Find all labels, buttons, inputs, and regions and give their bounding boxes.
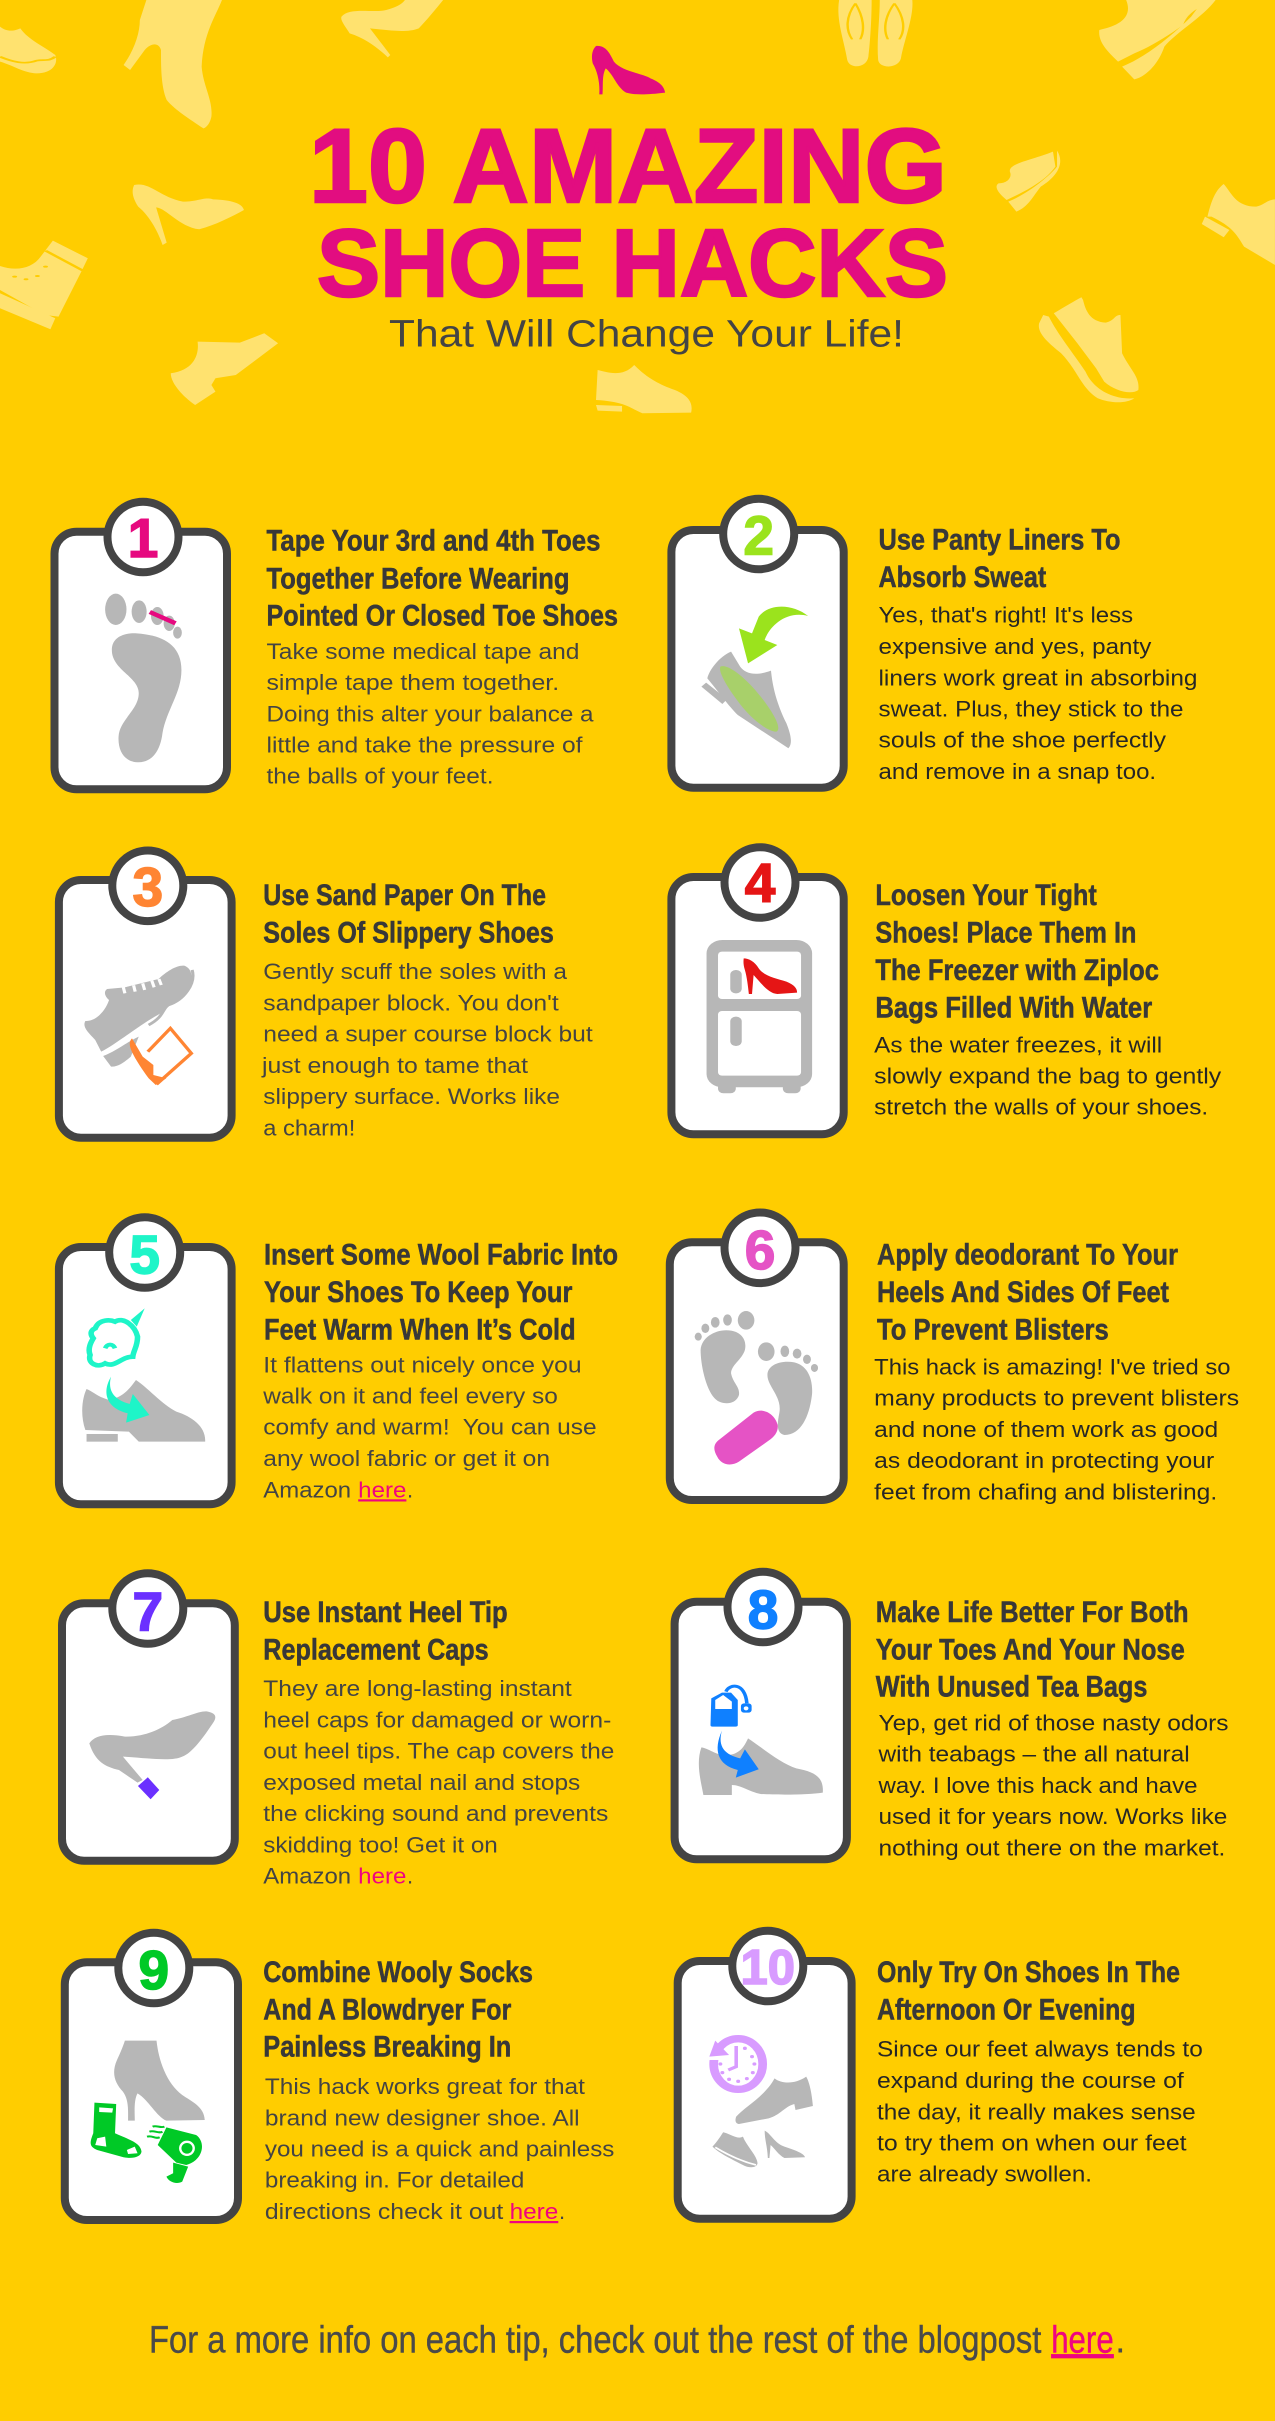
heading: Loosen Your Tight — [875, 879, 1097, 912]
body text: Gently scuff the soles with a — [263, 959, 568, 984]
body text: Amazon — [263, 1477, 351, 1502]
icon: heel with tip cap — [89, 1711, 215, 1799]
heading: Only Try On Shoes In The — [877, 1956, 1180, 1989]
body text: . — [407, 1863, 413, 1888]
body text — [874, 1354, 1239, 1504]
body text: sweat. Plus, they stick to the — [878, 697, 1184, 722]
heading — [877, 1238, 1178, 1346]
body text: as deodorant in protecting your — [874, 1448, 1214, 1473]
heading: Together Before Wearing — [266, 562, 570, 595]
card with number 7 — [62, 1573, 235, 1861]
tip 7 — [62, 1573, 614, 1888]
heading: Heels And Sides Of Feet — [877, 1276, 1169, 1309]
card with number 6 — [670, 1212, 844, 1500]
body text: with teabags – the all natural — [877, 1742, 1190, 1767]
body text: Amazon — [263, 1863, 351, 1888]
body text: brand new designer shoe. All — [265, 2105, 580, 2130]
body text: here — [358, 1863, 406, 1888]
body text: . — [407, 1477, 413, 1502]
tip 10 — [678, 1931, 1203, 2219]
icon: tea bag and shoe — [699, 1686, 823, 1795]
icon: wool and shoe with arrow — [82, 1308, 205, 1442]
body text — [261, 959, 593, 1140]
body text: This hack works great for that — [265, 2074, 585, 2099]
body text: walk on it and feel every so — [262, 1383, 558, 1408]
tip 8 — [675, 1572, 1228, 1860]
icon: pink high heel — [592, 46, 665, 94]
body text: Yep, get rid of those nasty odors — [878, 1711, 1228, 1736]
heading: Use Instant Heel Tip — [263, 1596, 508, 1629]
body text — [874, 1032, 1221, 1120]
icon: footprints with deodorant — [695, 1311, 818, 1464]
tip 5 — [59, 1217, 618, 1504]
body text: Take some medical tape and — [266, 639, 580, 664]
heading: Painless Breaking In — [263, 2031, 511, 2064]
body text — [878, 603, 1198, 784]
heading — [264, 1238, 618, 1346]
body text: feet from chafing and blistering. — [874, 1479, 1217, 1504]
body text: Yes, that's right! It's less — [878, 603, 1133, 628]
body text: It flattens out nicely once you — [263, 1352, 582, 1377]
footer note: here — [1051, 2319, 1114, 2361]
heading: Tape Your 3rd and 4th Toes — [266, 525, 600, 558]
heading: Apply deodorant To Your — [877, 1238, 1178, 1271]
card with number 8: 8 — [748, 1578, 778, 1640]
card with number 6: 6 — [745, 1219, 775, 1281]
heading: Combine Wooly Socks — [263, 1956, 533, 1989]
heading — [875, 879, 1159, 1024]
body text: here — [358, 1477, 406, 1502]
title: 10 AMAZING — [309, 108, 947, 225]
body text: liners work great in absorbing — [878, 665, 1198, 690]
body text: breaking in. For detailed — [265, 2168, 524, 2193]
heading: Afternoon Or Evening — [877, 1993, 1136, 2026]
body text: sandpaper block. You don't — [263, 990, 559, 1015]
body text: any wool fabric or get it on — [263, 1446, 550, 1471]
body text — [877, 1711, 1228, 1860]
tip 9 — [65, 1933, 614, 2224]
heading: Your Shoes To Keep Your — [264, 1276, 573, 1309]
card with number 10 — [678, 1931, 852, 2219]
body text: and none of them work as good — [874, 1417, 1218, 1442]
heading — [878, 523, 1120, 594]
card with number 3 — [59, 850, 232, 1138]
body text: exposed metal nail and stops — [263, 1770, 580, 1795]
body text: the balls of your feet. — [266, 764, 494, 789]
body text: souls of the shoe perfectly — [878, 728, 1166, 753]
body text: many products to prevent blisters — [874, 1386, 1239, 1411]
body text: slippery surface. Works like — [263, 1084, 560, 1109]
footer note: For a more info on each tip, check out the rest of the blogpost — [149, 2319, 1042, 2361]
body text — [877, 2037, 1203, 2187]
body text: As the water freezes, it will — [874, 1032, 1162, 1057]
body text: This hack is amazing! I've tried so — [874, 1354, 1230, 1379]
icon: sneaker with sanding block — [84, 966, 193, 1085]
card with number 10: 10 — [741, 1941, 795, 1995]
subtitle: That Will Change Your Life! — [389, 314, 904, 356]
body text: and remove in a snap too. — [878, 759, 1156, 784]
body text: a charm! — [263, 1115, 355, 1140]
heading: To Prevent Blisters — [877, 1313, 1109, 1346]
body text: you need is a quick and painless — [265, 2137, 614, 2162]
card with number 9: 9 — [139, 1939, 169, 2001]
body text: Doing this alter your balance a — [266, 701, 594, 726]
heading: Replacement Caps — [263, 1633, 489, 1666]
body text: simple tape them together. — [266, 670, 559, 695]
card with number 9 — [65, 1933, 238, 2220]
body text: are already swollen. — [877, 2162, 1092, 2187]
body text: little and take the pressure of — [266, 732, 583, 757]
body text: directions check it out — [265, 2199, 503, 2224]
footer note: . — [1115, 2319, 1126, 2361]
body text: the clicking sound and prevents — [263, 1801, 608, 1826]
body text — [266, 639, 594, 789]
heading: Insert Some Wool Fabric Into — [264, 1238, 618, 1271]
card with number 4: 4 — [745, 852, 776, 914]
body text: stretch the walls of your shoes. — [874, 1095, 1208, 1120]
icon: shoe with panty liner and arrow — [701, 607, 808, 748]
heading: Soles Of Slippery Shoes — [263, 917, 554, 950]
heading: Use Sand Paper On The — [263, 879, 546, 912]
card with number 8 — [675, 1572, 847, 1859]
body text: way. I love this hack and have — [877, 1773, 1198, 1798]
heading — [263, 879, 554, 950]
title: SHOE HACKS — [317, 210, 948, 317]
body text: used it for years now. Works like — [878, 1804, 1227, 1829]
heading: Feet Warm When It’s Cold — [264, 1313, 576, 1346]
heading: Your Toes And Your Nose — [876, 1633, 1185, 1666]
card with number 3: 3 — [133, 856, 163, 918]
tip 3 — [59, 850, 593, 1140]
heading — [263, 1956, 533, 2064]
tip 2 — [671, 499, 1198, 788]
body text: to try them on when our feet — [877, 2130, 1187, 2155]
heading: Use Panty Liners To — [878, 523, 1120, 556]
body text: They are long-lasting instant — [263, 1676, 572, 1701]
icon: boot, sock and blowdryer — [91, 2041, 205, 2183]
icon: fridge with red shoe — [707, 940, 812, 1093]
heading: Bags Filled With Water — [875, 991, 1152, 1024]
icon: foot with taped toes — [105, 594, 182, 762]
card with number 5 — [59, 1217, 232, 1504]
body text: expensive and yes, panty — [878, 634, 1151, 659]
card with number 7: 7 — [133, 1581, 163, 1643]
body text — [263, 1676, 614, 1888]
body text: out heel tips. The cap covers the — [263, 1739, 614, 1764]
body text: here — [510, 2199, 558, 2224]
heading: The Freezer with Ziploc — [875, 954, 1159, 987]
body text: skidding too! Get it on — [263, 1832, 498, 1857]
heading — [877, 1956, 1180, 2026]
heading — [876, 1596, 1189, 1704]
heading: With Unused Tea Bags — [876, 1671, 1147, 1704]
heading: Make Life Better For Both — [876, 1596, 1189, 1629]
tip 4 — [671, 847, 1221, 1134]
card with number 2: 2 — [743, 505, 774, 567]
card with number 1: 1 — [128, 507, 158, 569]
body text: expand during the course of — [877, 2068, 1185, 2093]
decorative shoe pattern — [0, 0, 1275, 413]
body text — [262, 1352, 597, 1502]
title — [309, 108, 948, 317]
tip 1 — [54, 502, 618, 789]
body text: slowly expand the bag to gently — [874, 1064, 1221, 1089]
heading — [266, 525, 618, 633]
body text: nothing out there on the market. — [878, 1835, 1225, 1860]
card with number 5: 5 — [129, 1223, 160, 1285]
body text: Since our feet always tends to — [877, 2037, 1203, 2062]
body text: the day, it really makes sense — [877, 2099, 1196, 2124]
card with number 4 — [671, 847, 844, 1134]
body text: need a super course block but — [263, 1022, 593, 1047]
heading: Absorb Sweat — [878, 561, 1046, 594]
card with number 2 — [671, 499, 844, 788]
heading — [263, 1596, 508, 1666]
tip 6 — [670, 1212, 1239, 1504]
body text: . — [559, 2199, 565, 2224]
heading: And A Blowdryer For — [263, 1993, 512, 2026]
body text — [265, 2074, 614, 2224]
heading: Pointed Or Closed Toe Shoes — [266, 600, 618, 633]
icon: clock and three shoes — [709, 2039, 813, 2167]
body text: just enough to tame that — [261, 1053, 528, 1078]
body text: heel caps for damaged or worn- — [263, 1707, 611, 1732]
card with number 1 — [54, 502, 227, 789]
heading: Shoes! Place Them In — [875, 917, 1136, 950]
body text: comfy and warm! You can use — [263, 1415, 597, 1440]
